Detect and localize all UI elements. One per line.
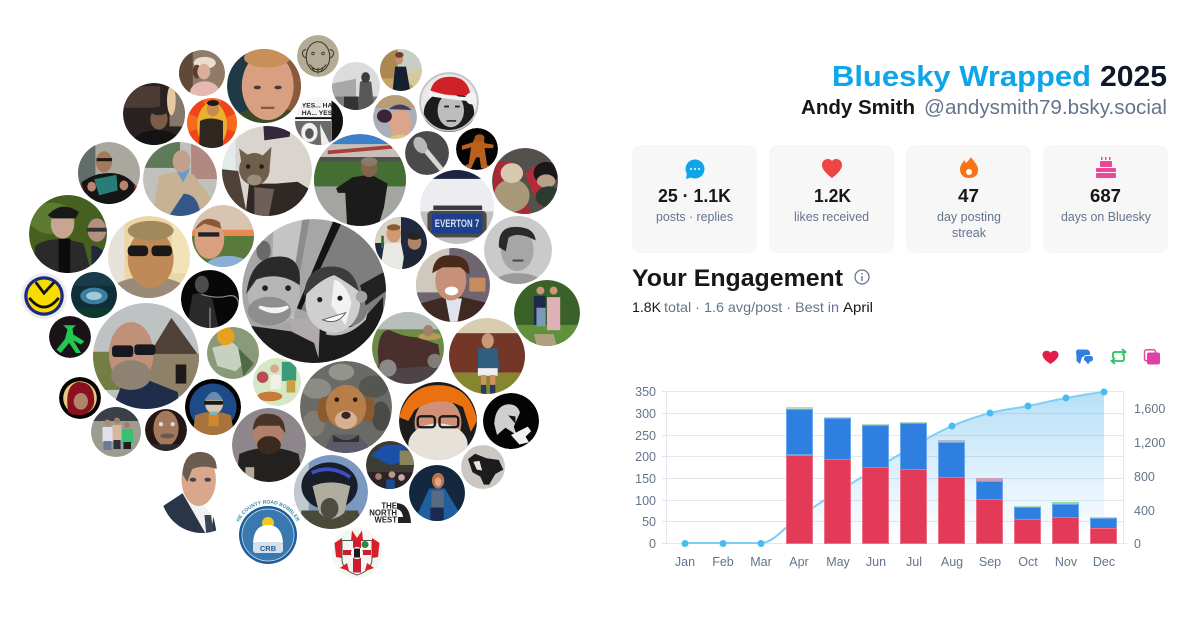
avatar: laughing man with sign bbox=[416, 248, 490, 322]
avatar: comic panel bbox=[295, 97, 344, 145]
combined chart: monthly engagement bars and cumulative line bbox=[635, 385, 1165, 569]
avatar: two men with champagne bbox=[375, 217, 427, 269]
avatar: dark selfie bbox=[123, 83, 185, 145]
user name and handle bbox=[801, 97, 1167, 119]
engagement summary: April bbox=[843, 299, 873, 315]
left axis labels: 150 bbox=[635, 472, 656, 486]
avatar: orange gingerbread figure bbox=[456, 128, 498, 170]
panel: posts and replies: 25 · 1.1K bbox=[658, 186, 731, 206]
left axis labels: 250 bbox=[635, 429, 656, 443]
avatar: man in beanie with beer bbox=[185, 379, 241, 435]
month labels: Mar bbox=[750, 555, 772, 569]
right axis labels: 0 bbox=[1134, 537, 1141, 551]
engagement summary: 1.8K bbox=[632, 299, 662, 315]
month labels: Oct bbox=[1018, 555, 1038, 569]
left axis labels: 0 bbox=[649, 537, 656, 551]
avatar: bald man with stone pyramid bbox=[93, 303, 199, 409]
avatar: orange hat white beard bbox=[399, 382, 477, 465]
avatar: tabby cat bbox=[222, 126, 312, 216]
heading: your engagement: Your Engagement bbox=[632, 265, 843, 292]
avatar: black and white skull figure bbox=[483, 393, 539, 449]
avatar: coat of arms bbox=[332, 528, 382, 578]
avatar: man in beige jumper bbox=[143, 142, 217, 216]
avatar: man at stadium bbox=[314, 134, 406, 226]
avatar: The North West logo bbox=[369, 502, 411, 524]
icon: legend repost bbox=[1112, 349, 1126, 364]
right axis labels: 1,200 bbox=[1134, 436, 1165, 450]
panel: likes received bbox=[769, 145, 894, 253]
icon: chat bubble bbox=[686, 160, 704, 179]
avatar: County Road Bobblers badge: CRB bbox=[260, 544, 277, 553]
avatar: Everton number plate: EVERTON 7 bbox=[435, 218, 479, 230]
panel: posts and replies bbox=[632, 145, 757, 253]
month labels bbox=[675, 555, 1115, 569]
left axis labels: 300 bbox=[635, 407, 656, 421]
avatar: three men bbox=[91, 407, 141, 457]
right axis labels: 800 bbox=[1134, 470, 1155, 484]
left axis labels: 100 bbox=[635, 494, 656, 508]
stacked bars bbox=[786, 407, 1117, 544]
month labels: Nov bbox=[1055, 555, 1078, 569]
avatar: boy in football kit bbox=[449, 318, 525, 394]
icon: legend replies bbox=[1076, 350, 1094, 364]
grid lines bbox=[662, 391, 1127, 544]
month labels: Dec bbox=[1093, 555, 1115, 569]
right axis labels: 400 bbox=[1134, 504, 1155, 518]
panel: day posting streak: streak bbox=[952, 225, 986, 240]
avatar: Everton number plate bbox=[420, 170, 494, 244]
avatar: dog on rocks bbox=[300, 361, 392, 453]
month labels: Sep bbox=[979, 555, 1001, 569]
avatar: shoe car bbox=[372, 312, 444, 384]
avatar: Che with santa hat bbox=[419, 72, 479, 134]
title: 2025 bbox=[1100, 61, 1167, 93]
avatar: black and white father and son bbox=[242, 219, 386, 363]
avatar: suited man on sunburst bbox=[187, 98, 237, 148]
panel: days on Bluesky: days on Bluesky bbox=[1061, 209, 1151, 224]
line points bbox=[682, 388, 1108, 547]
avatar: The North West logo: THE bbox=[381, 502, 397, 510]
month labels: Jun bbox=[866, 555, 886, 569]
avatar: spoon on dark surface bbox=[405, 131, 449, 175]
avatar: crowd with blue flags bbox=[366, 441, 414, 489]
icon: legend heart bbox=[1042, 351, 1058, 364]
title: Bluesky Wrapped bbox=[832, 61, 1091, 93]
avatar: red mascot bbox=[59, 377, 101, 419]
avatar: aerial stadium at night bbox=[71, 272, 117, 318]
chart legend icons bbox=[1042, 349, 1160, 364]
avatar: Leeds smiley badge bbox=[21, 273, 67, 319]
icon: heart bbox=[822, 159, 842, 178]
month labels: Apr bbox=[789, 555, 809, 569]
month labels: Feb bbox=[712, 555, 734, 569]
engagement summary: total · 1.6 avg/post · Best in bbox=[664, 299, 839, 315]
avatar: The North West logo: NORTH bbox=[369, 508, 397, 518]
avatar: man in sunglasses bbox=[108, 216, 190, 298]
avatar: woman in blue dress bbox=[409, 465, 465, 521]
month labels: Jan bbox=[675, 555, 695, 569]
avatar: comic panel: HA... YES! bbox=[302, 110, 334, 117]
avatar: dark figure bbox=[181, 270, 239, 328]
avatar: woman in bonnet bbox=[179, 50, 225, 96]
icon: info bbox=[855, 270, 869, 284]
panel: posts and replies: posts · replies bbox=[656, 209, 733, 224]
right axis labels: 1,600 bbox=[1134, 402, 1165, 416]
left axis labels: 350 bbox=[635, 385, 656, 399]
avatar: County Road Bobblers badge: THE COUNTY ROAD BOBBLERS bbox=[236, 500, 300, 522]
avatar: family in garden bbox=[514, 280, 580, 346]
avatar: man reading a book bbox=[78, 142, 140, 204]
cumulative area bbox=[685, 392, 1104, 543]
avatar: man at sunset bbox=[192, 205, 254, 267]
avatar: woman in black dress bbox=[380, 49, 422, 91]
avatar: pilot helmet bbox=[294, 455, 368, 529]
icon: birthday cake bbox=[1096, 157, 1116, 178]
icon: legend quote bbox=[1144, 350, 1160, 364]
panel: day posting streak: day posting bbox=[937, 209, 1001, 224]
icon: flame bbox=[960, 157, 978, 178]
avatar: The North West logo: WEST bbox=[374, 516, 397, 524]
avatar: cartoon characters bbox=[253, 358, 301, 406]
user name and handle: @andysmith79.bsky.social bbox=[924, 97, 1167, 119]
avatar: painting with orange slice bbox=[207, 327, 259, 379]
avatar: ginger man bbox=[227, 49, 301, 123]
avatar: green Ampelmann bbox=[49, 316, 91, 358]
avatar: comic panel: YES... HA bbox=[302, 103, 332, 110]
avatar: black and white portrait bbox=[484, 216, 552, 284]
avatar: man with cap and glove bbox=[373, 95, 417, 139]
panel: day posting streak: 47 bbox=[958, 186, 979, 206]
panel: likes received: likes received bbox=[794, 209, 869, 224]
avatar: County Road Bobblers badge bbox=[236, 500, 300, 564]
avatar: man with moustache bbox=[145, 409, 187, 451]
avatar: man by the sea bbox=[332, 62, 380, 111]
left axis labels bbox=[635, 385, 656, 551]
panel: days on Bluesky bbox=[1043, 145, 1168, 253]
left axis labels: 50 bbox=[642, 515, 656, 529]
panel: day posting streak bbox=[906, 145, 1031, 253]
user name and handle: Andy Smith bbox=[801, 97, 915, 119]
avatar: santa bbox=[492, 148, 562, 214]
avatar: bearded man in black bbox=[232, 408, 306, 482]
avatar: two men in dark coats bbox=[29, 195, 109, 273]
avatar: suited man on white bbox=[159, 451, 243, 533]
avatar cluster bbox=[21, 35, 580, 578]
month labels: May bbox=[826, 555, 851, 569]
cumulative line bbox=[685, 392, 1104, 543]
avatar: beard sketch bbox=[297, 35, 339, 77]
month labels: Jul bbox=[906, 555, 922, 569]
panel: days on Bluesky: 687 bbox=[1090, 186, 1121, 206]
avatar: badger drawing bbox=[461, 445, 505, 489]
left axis labels: 200 bbox=[635, 450, 656, 464]
panel: likes received: 1.2K bbox=[814, 186, 851, 206]
right axis labels bbox=[1134, 402, 1165, 551]
month labels: Aug bbox=[941, 555, 963, 569]
